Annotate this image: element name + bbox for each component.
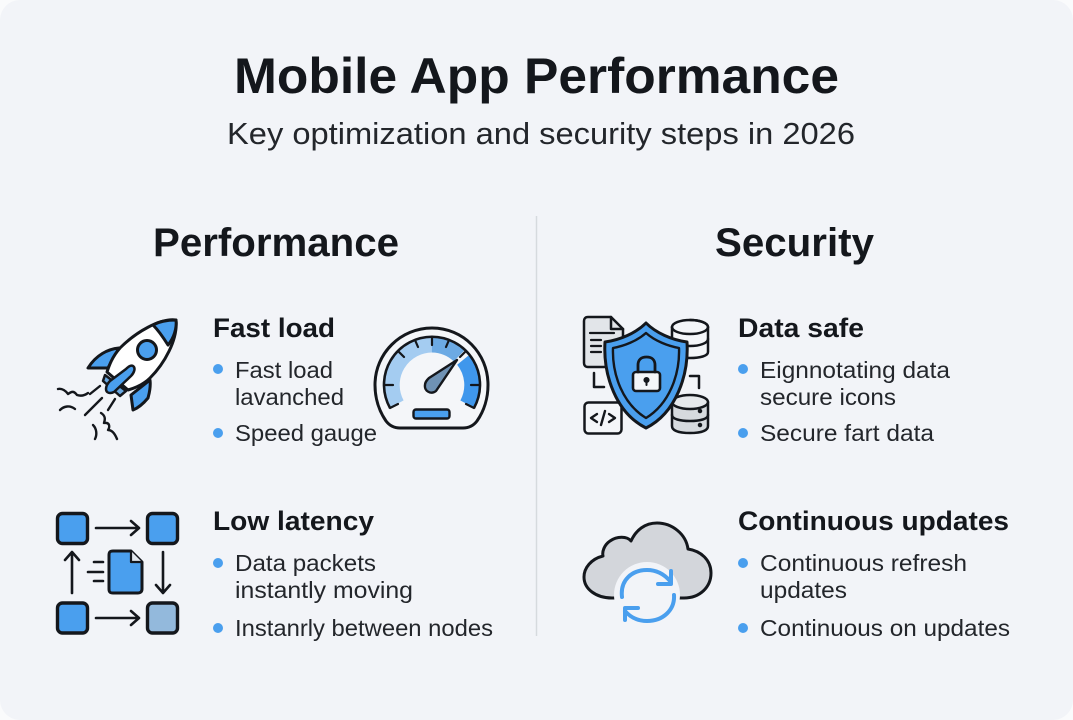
text block: Fast load: lavanched (235, 384, 344, 410)
text block: Continuous updates (738, 506, 1010, 641)
text block: Low latency: Instanrly between nodes (235, 615, 493, 641)
text block: Data safe: Data safe (738, 313, 864, 343)
heading: Security: Security (715, 221, 875, 265)
icon: shield with data (584, 317, 708, 434)
text block: Low latency (213, 506, 493, 641)
text block: Data safe: secure icons (760, 384, 896, 410)
subtitle: Key optimization and security steps in 2026 (227, 116, 855, 151)
text block: Fast load: Fast load (213, 313, 335, 343)
text block: Low latency: Data packets (235, 550, 376, 576)
text block: Continuous updates: Continuous on updates (760, 615, 1010, 641)
text block: Fast load (213, 313, 377, 446)
text block: Continuous updates: Continuous updates (738, 506, 1009, 536)
text block: Data safe (738, 313, 950, 446)
icon: rocket (58, 320, 176, 439)
text block: Fast load: Fast load (235, 357, 333, 383)
heading: Performance: Performance (153, 221, 399, 265)
text block: Low latency: instantly moving (235, 577, 413, 603)
text block: Data safe: Eignnotating data (760, 357, 950, 383)
text block: Continuous updates: updates (760, 577, 847, 603)
text block: Fast load: Speed gauge (235, 420, 377, 446)
icon: data packet network (58, 514, 178, 633)
icon: speed gauge (375, 328, 488, 428)
text block: Continuous updates: Continuous refresh (760, 550, 967, 576)
icon: cloud refresh (584, 523, 711, 628)
text block: Low latency: Low latency (213, 506, 374, 536)
title: Mobile App Performance (234, 48, 839, 104)
text block: Data safe: Secure fart data (760, 420, 934, 446)
